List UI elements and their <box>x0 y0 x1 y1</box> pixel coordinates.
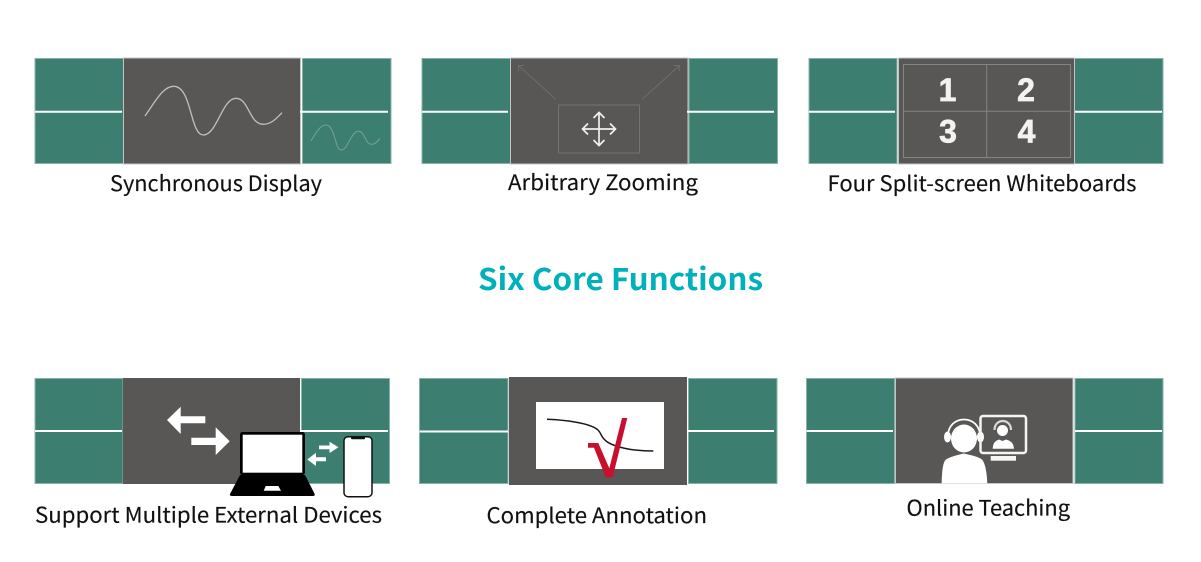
zoom window <box>558 105 640 153</box>
icon: student with headset <box>942 420 987 484</box>
label: Four Split-screen Whiteboards <box>828 168 1137 198</box>
center display <box>124 58 300 164</box>
center display <box>510 58 688 164</box>
center display <box>509 377 687 485</box>
icon: two-way arrows large <box>167 407 230 455</box>
label: Online Teaching <box>906 492 1070 522</box>
center display <box>896 378 1073 484</box>
center display <box>898 58 1074 164</box>
icon: two-way arrows small <box>307 442 338 466</box>
numbers 1 to 4: 1 <box>939 72 956 108</box>
left green board <box>422 58 510 164</box>
left green board <box>806 378 894 484</box>
numbers 1 to 4: 2 <box>1017 72 1035 108</box>
four-split grid <box>904 64 1070 158</box>
icon: laptop <box>230 432 315 496</box>
icon: red check mark <box>588 418 627 477</box>
white document <box>536 402 664 469</box>
icon: move cross <box>582 112 616 146</box>
right green board <box>688 378 777 484</box>
panel: online teaching <box>806 378 1163 522</box>
corner zoom arrows <box>518 66 679 99</box>
left green board <box>809 58 897 164</box>
label: Support Multiple External Devices <box>35 500 382 530</box>
wave on center display <box>145 86 282 135</box>
label: Arbitrary Zooming <box>508 167 698 197</box>
left green board <box>35 378 123 484</box>
right green board <box>1074 58 1163 164</box>
synced wave on right board <box>311 125 380 150</box>
label: Synchronous Display <box>110 168 322 198</box>
panel: synchronous display <box>35 58 391 198</box>
numbers 1 to 4 <box>939 72 1036 150</box>
panel: arbitrary zooming <box>422 58 778 197</box>
numbers 1 to 4: 3 <box>939 114 957 150</box>
panel: complete annotation <box>420 377 777 530</box>
panel: four split-screen whiteboards <box>809 58 1163 198</box>
center display <box>123 378 300 484</box>
icon: phone <box>344 437 372 497</box>
label: Complete Annotation <box>486 500 707 530</box>
right green board <box>302 58 391 164</box>
right green board <box>302 378 390 484</box>
icon: monitor with teacher <box>980 416 1026 461</box>
numbers 1 to 4: 4 <box>1018 114 1036 150</box>
title: Six Core Functions <box>478 255 763 299</box>
left green board <box>35 58 124 164</box>
annotated curve <box>547 419 653 451</box>
right green board <box>689 58 778 164</box>
left green board <box>420 378 508 484</box>
panel: support multiple external devices <box>35 378 390 530</box>
right green board <box>1075 378 1163 484</box>
